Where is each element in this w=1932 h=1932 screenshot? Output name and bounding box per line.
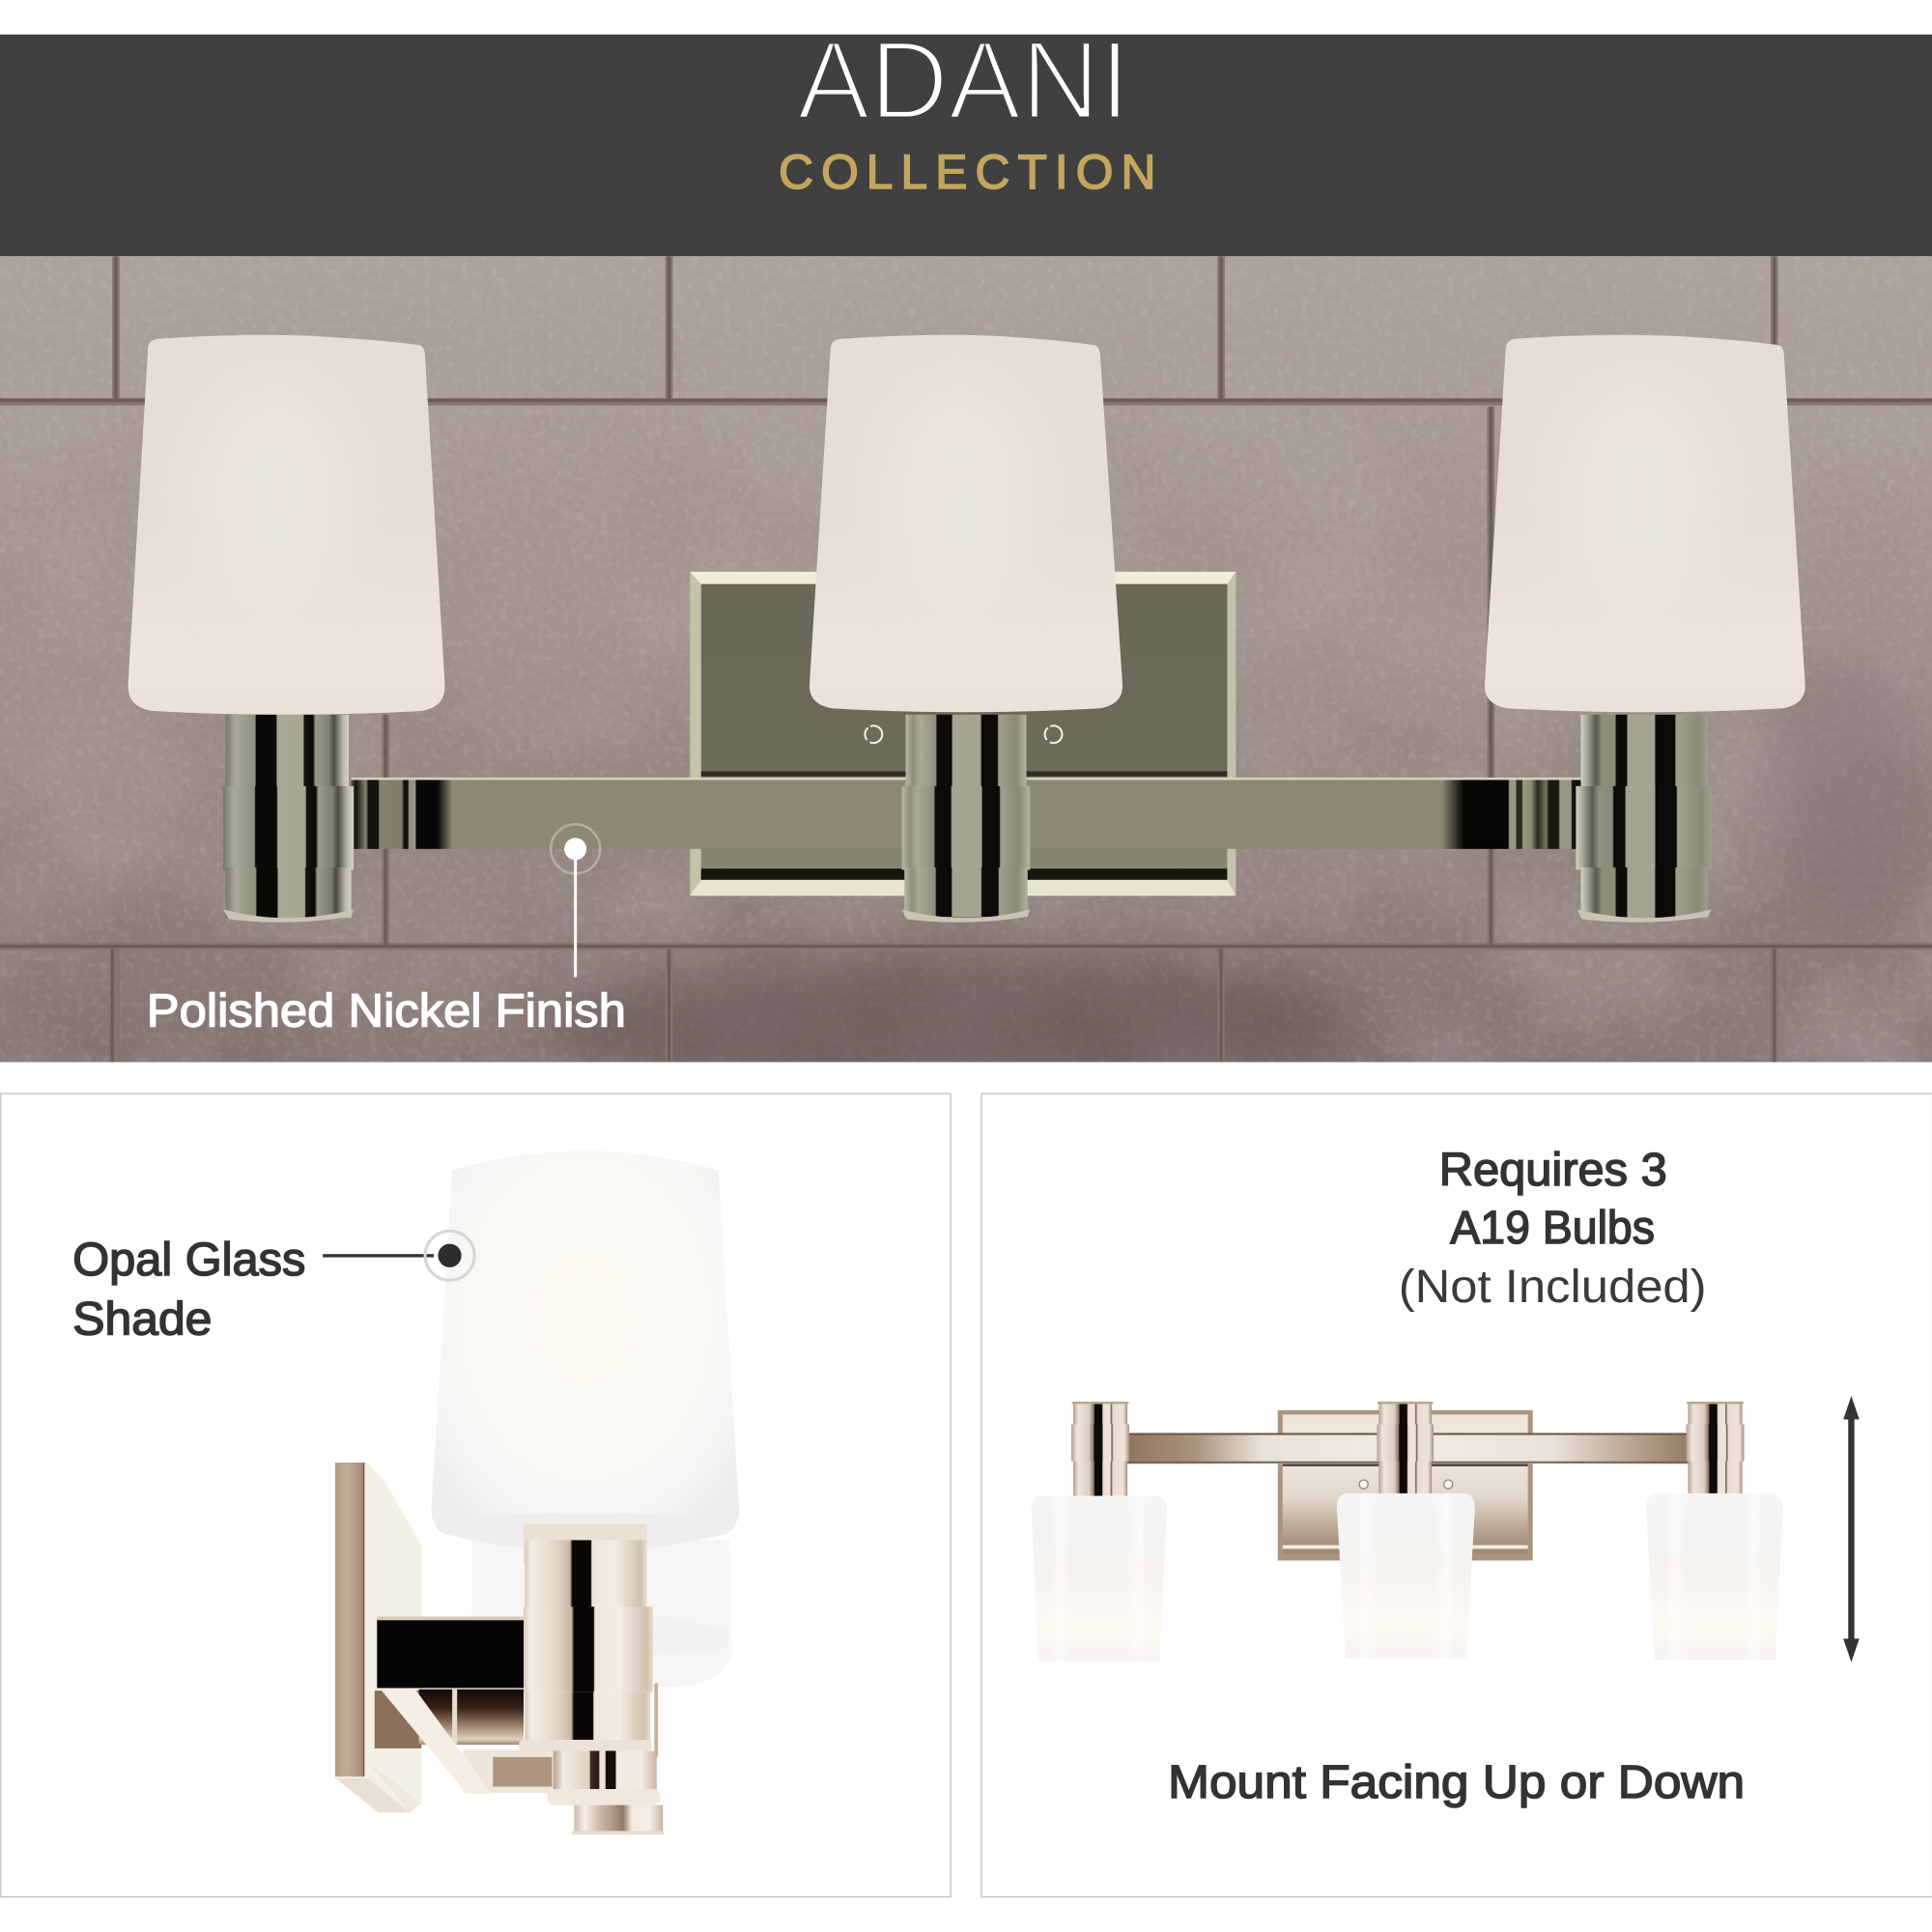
bulbs text block: Requires 3	[1439, 1144, 1667, 1196]
shade: right	[1646, 1493, 1783, 1660]
glass shade: centre	[810, 335, 1122, 712]
opal glass label: Opal Glass	[72, 1234, 305, 1286]
arm assembly	[375, 1616, 554, 1794]
bulbs text block: A19 Bulbs	[1450, 1202, 1655, 1254]
shade label: Shade	[72, 1293, 212, 1345]
panel: lifestyle wall photo	[0, 256, 1932, 1096]
wall tile background	[0, 256, 1932, 1096]
lower arm box	[464, 1749, 554, 1793]
panel: opal glass shade detail	[1, 1094, 951, 1897]
wall plate	[335, 1463, 421, 1812]
bulbs text block: (Not Included)	[1399, 1261, 1707, 1313]
back shade	[472, 1540, 732, 1687]
header band	[0, 18, 1932, 256]
title: ADANI: ADANI	[797, 18, 1130, 142]
mounting holes	[865, 725, 1062, 743]
chrome box behind brace	[375, 1690, 421, 1748]
callout label: Polished Nickel Finish	[147, 984, 626, 1037]
cylinder: centre	[1377, 1402, 1434, 1495]
socket cylinder	[519, 1524, 665, 1834]
mounting holes	[1359, 1480, 1453, 1489]
double-headed arrow	[1843, 1396, 1860, 1662]
inner shade rim	[434, 1513, 737, 1551]
backplate	[1278, 1410, 1533, 1560]
wall plate side	[335, 1463, 421, 1812]
bulbs text block	[1399, 1144, 1707, 1313]
glass shade: right	[1485, 335, 1805, 712]
diagonal brace	[380, 1688, 492, 1794]
arm	[1126, 1435, 1690, 1463]
glass shade main	[431, 1151, 739, 1551]
callout marker	[323, 1231, 474, 1280]
black arm	[377, 1619, 524, 1688]
cylinder: left	[1071, 1402, 1129, 1498]
fixture: right socket cylinder	[1576, 715, 1712, 923]
subtitle: COLLECTION: COLLECTION	[779, 145, 1155, 199]
shade: centre	[1337, 1493, 1475, 1659]
small fixture illustration	[1032, 1402, 1783, 1661]
fixture: centre socket cylinder	[902, 715, 1030, 923]
fixture: backplate	[690, 572, 1236, 895]
fixture: left socket cylinder	[223, 715, 354, 923]
mount label: Mount Facing Up or Down	[1168, 1756, 1745, 1808]
shade: left	[1032, 1495, 1167, 1661]
callout marker	[551, 824, 600, 977]
cylinder: right	[1687, 1402, 1744, 1495]
wall plate front	[335, 1463, 367, 1776]
glass shade: left	[128, 335, 445, 715]
panel: bulb and mounting info	[981, 1094, 1932, 1897]
fixture: horizontal arm	[352, 778, 1583, 849]
callout: polished nickel finish	[147, 824, 626, 1037]
